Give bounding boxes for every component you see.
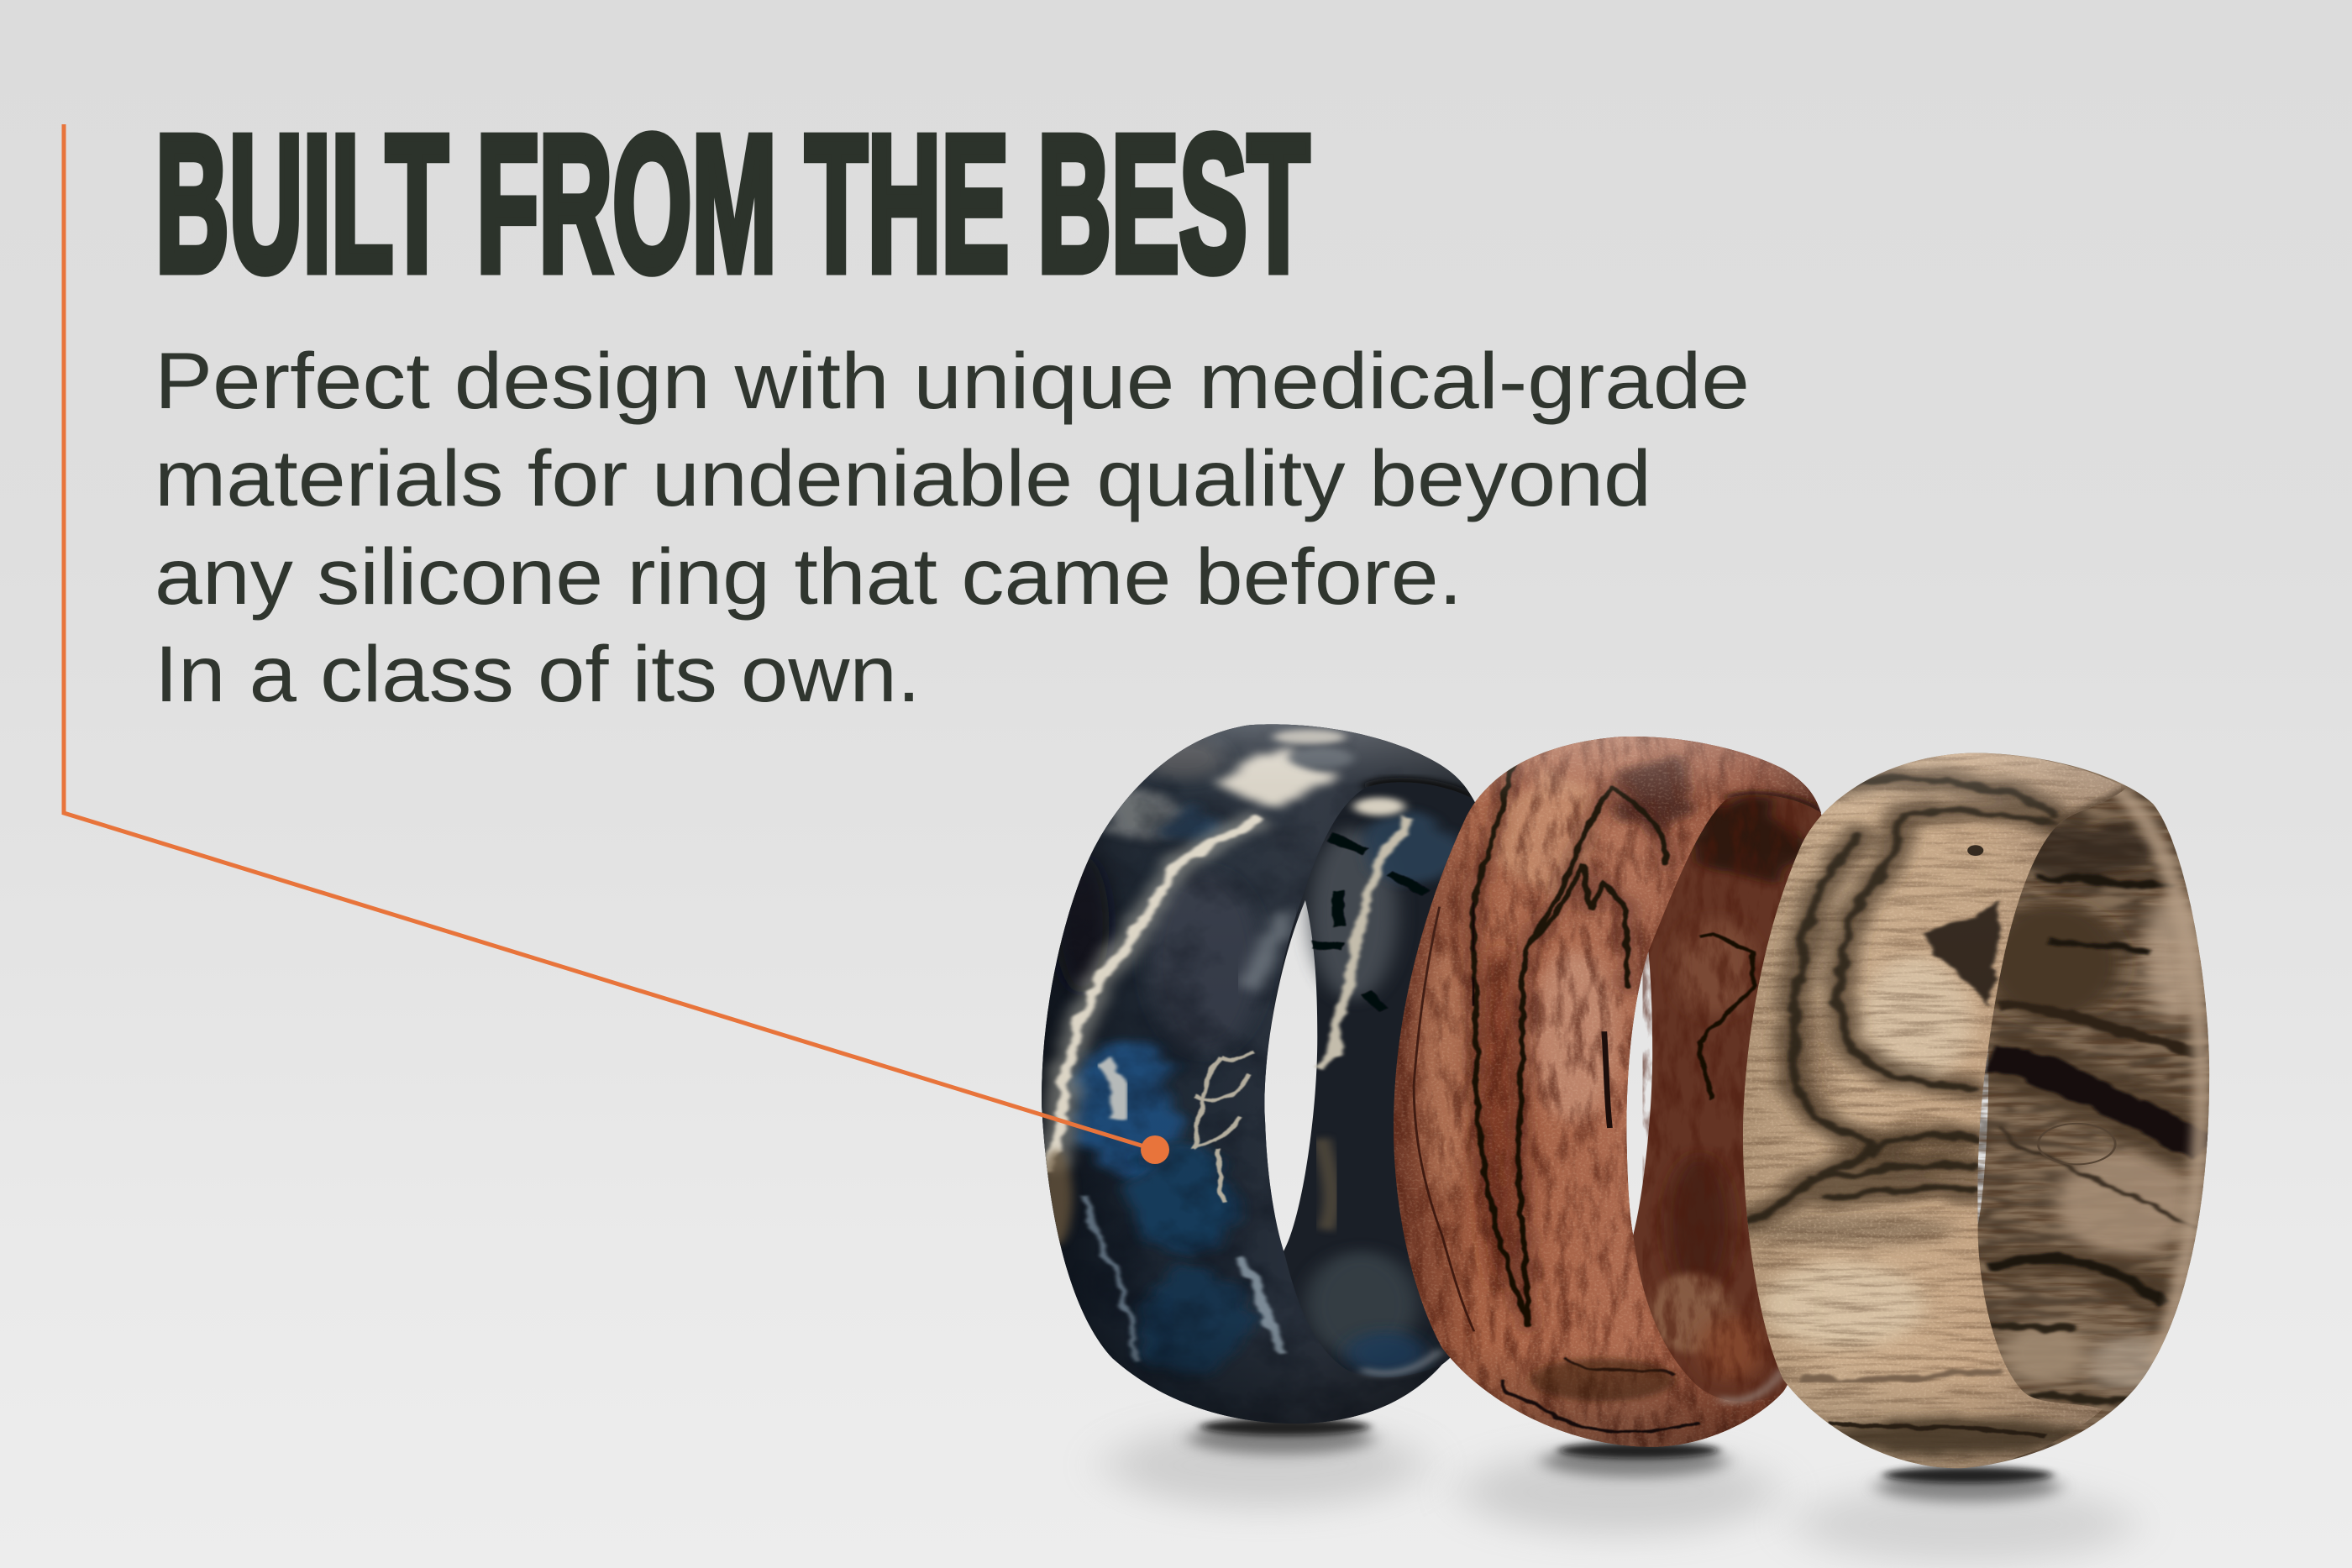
product photo: three rings <box>1032 716 2213 1565</box>
body text: materials for undeniable quality beyond <box>155 434 1651 523</box>
red ring rim highlight <box>1719 1369 1783 1401</box>
callout dot <box>1141 1135 1169 1164</box>
body text: In a class of its own. <box>155 630 921 719</box>
body text <box>155 337 1750 719</box>
floor shadows <box>1109 1419 2133 1565</box>
red ring inner surface <box>1394 737 1835 1447</box>
blue ring front band <box>1032 716 1482 1428</box>
title: BUILT FROM THE BEST <box>155 95 1310 312</box>
body text: Perfect design with unique medical-grade <box>155 337 1750 426</box>
blue marble ring <box>1042 724 1475 1424</box>
wood ring front band <box>1735 747 2127 1476</box>
red ring front band <box>1386 732 1828 1452</box>
body text: any silicone ring that came before. <box>155 532 1462 621</box>
red spalted wood ring <box>1386 732 1835 1452</box>
blue ring inner surface <box>1042 724 1506 1424</box>
olive burl wood ring <box>1735 747 2213 1476</box>
callout leader line <box>64 124 1155 1150</box>
wood ring inner surface <box>1743 753 2213 1471</box>
blue ring rim highlight <box>1362 1350 1441 1373</box>
